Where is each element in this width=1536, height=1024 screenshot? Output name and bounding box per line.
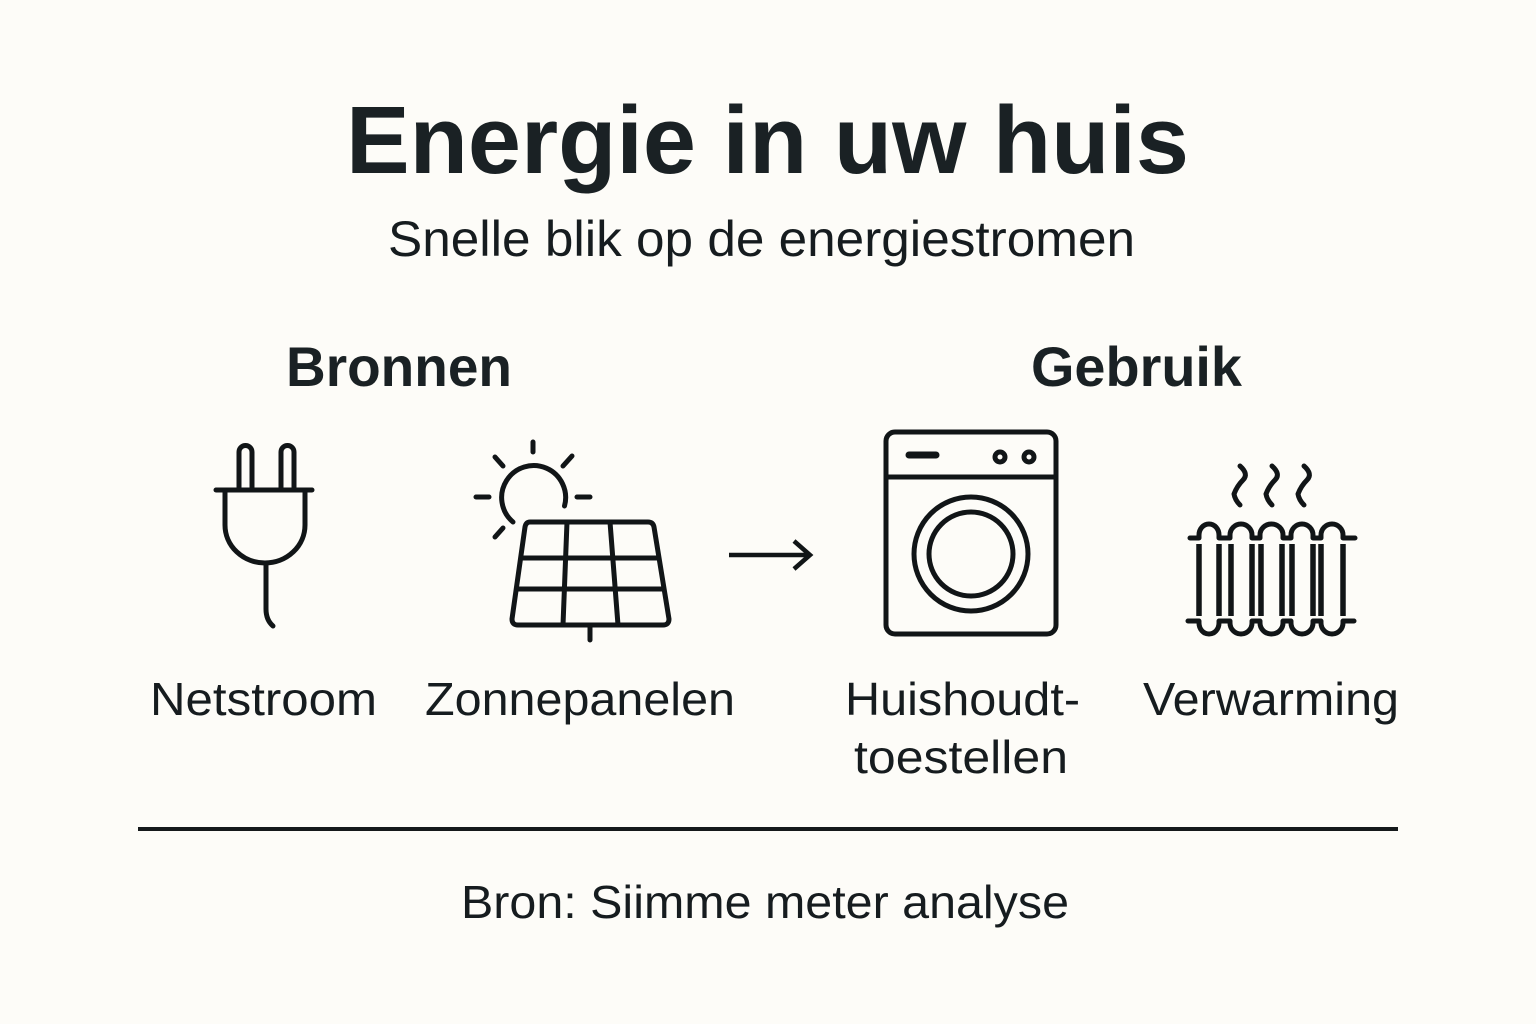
title: Energie in uw huis (346, 87, 1189, 194)
label: Netstroom: Netstroom (150, 673, 377, 725)
label: Huishoudtoestellen: Huishoudt- (845, 673, 1080, 725)
icon: plug (216, 446, 312, 626)
heading: Bronnen: Bronnen (286, 335, 512, 398)
heading: Gebruik: Gebruik (1031, 335, 1243, 398)
icon: solar panel with sun (476, 442, 669, 640)
subtitle: Snelle blik op de energiestromen (388, 211, 1135, 267)
label: Huishoudtoestellen: toestellen (854, 731, 1068, 783)
icon: radiator with heat waves (1188, 466, 1355, 634)
source note: Bron: Siimme meter analyse (461, 876, 1069, 928)
label: Verwarming: Verwarming (1143, 673, 1399, 725)
icon: washing machine (886, 432, 1056, 634)
label: Zonnepanelen: Zonnepanelen (425, 673, 735, 725)
arrow (729, 541, 810, 569)
label: Huishoudtoestellen (845, 673, 1080, 783)
